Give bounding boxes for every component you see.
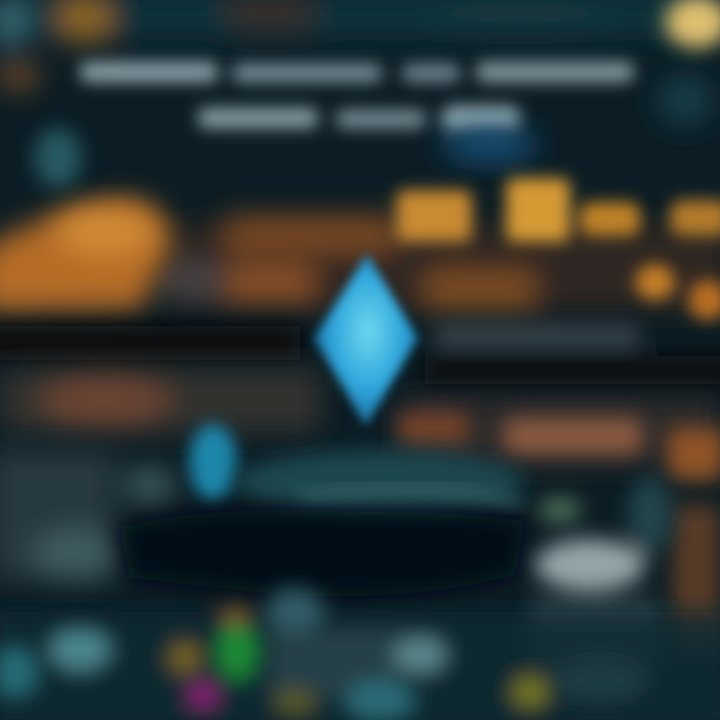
dark horizontal band: [0, 326, 720, 384]
right grey white shape: [530, 477, 672, 670]
glowing light top right: [665, 0, 720, 48]
small teal diamond upper left: [34, 128, 82, 188]
brown lower band: [0, 368, 720, 466]
bottom cluster of colourful shapes: [0, 588, 720, 720]
blue glow under title: [442, 127, 538, 163]
orange blurred band: [160, 215, 720, 312]
top decorative band: [0, 0, 720, 126]
orange heading smudges: [396, 178, 720, 320]
dark bowl: [120, 450, 525, 597]
title text smudges: [80, 62, 634, 132]
left orange glow: [0, 198, 170, 312]
icon: blue crystal diamond: [314, 254, 418, 426]
icon: small blue crystal: [189, 424, 237, 500]
lower left grey teal area: [0, 450, 176, 581]
lower right orange smudges: [398, 412, 720, 650]
